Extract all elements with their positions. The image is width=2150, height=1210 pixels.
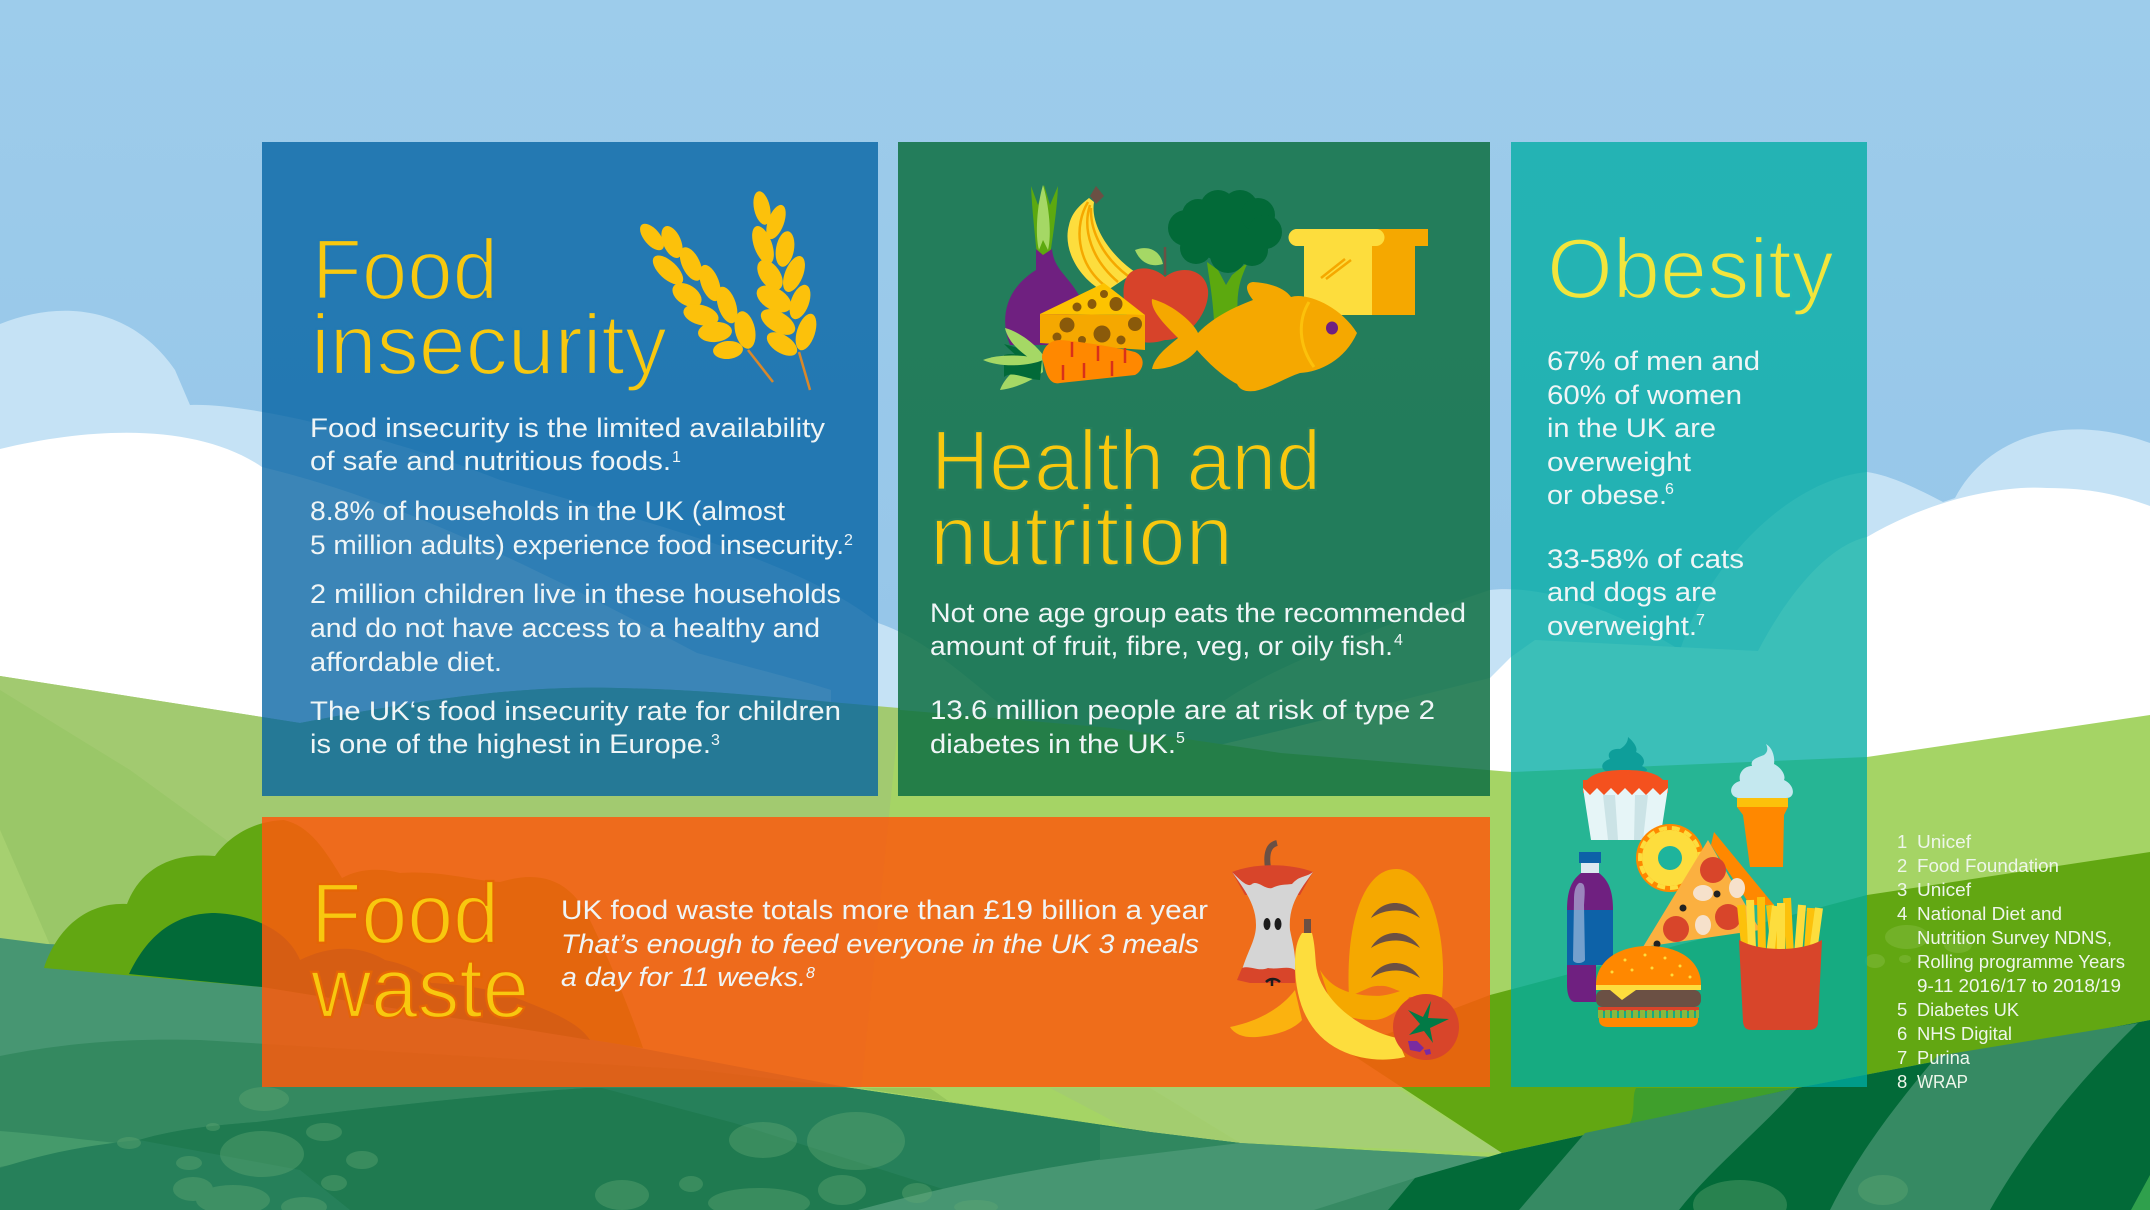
- text: health and nutrition: amount of fruit, fibre, veg, or oily fish.: [930, 631, 1393, 661]
- text: food waste: [561, 895, 1208, 992]
- bush: [44, 820, 643, 1048]
- text: food insecurity: affordable diet.: [310, 647, 502, 677]
- footnotes: 6: [1897, 1023, 1907, 1044]
- text: obesity: 33-58% of cats: [1547, 544, 1744, 574]
- panel: obesity: [1511, 142, 1867, 1087]
- text: food insecurity: 2: [844, 532, 853, 549]
- text: health and nutrition: Not one age group eats the recommended: [930, 598, 1466, 628]
- footnotes: Nutrition Survey NDNS,: [1917, 927, 2112, 948]
- text: obesity: 6: [1665, 481, 1674, 498]
- text: food insecurity: and do not have access to a healthy and: [310, 613, 820, 643]
- panel: food waste: [262, 817, 1490, 1087]
- footnotes: 1: [1897, 831, 1907, 852]
- text: obesity: 67% of men and: [1547, 346, 1760, 376]
- text: food insecurity: 1: [672, 449, 681, 466]
- heading: health and nutrition: Health and: [931, 414, 1321, 509]
- text: obesity: overweight.: [1547, 611, 1697, 641]
- footnotes: National Diet and: [1917, 903, 2062, 924]
- heading: food insecurity: Food: [312, 223, 498, 318]
- footnotes: 8: [1897, 1071, 1907, 1092]
- text: food insecurity: is one of the highest in Europe.: [310, 729, 711, 759]
- heading: health and nutrition: nutrition: [930, 489, 1233, 584]
- text: obesity: and dogs are: [1547, 577, 1717, 607]
- text: food waste: UK food waste totals more than £19 billion a year: [561, 895, 1208, 925]
- text: food insecurity: 5 million adults) experience food insecurity.: [310, 530, 844, 560]
- text: food insecurity: of safe and nutritious foods.: [310, 446, 671, 476]
- footnotes: 7: [1897, 1047, 1907, 1068]
- footnotes: Unicef: [1917, 879, 1972, 900]
- text: obesity: or obese.: [1547, 480, 1667, 510]
- heading: food insecurity: insecurity: [311, 298, 667, 393]
- footnotes: Unicef: [1917, 831, 1972, 852]
- footnotes: Diabetes UK: [1917, 999, 2020, 1020]
- illustration: healthy foods: [983, 185, 1428, 391]
- footnotes: NHS Digital: [1917, 1023, 2012, 1044]
- heading: obesity: Obesity: [1547, 222, 1834, 317]
- footnotes: Food Foundation: [1917, 855, 2059, 876]
- footnotes: Purina: [1917, 1047, 1971, 1068]
- illustration: junk food: [1567, 737, 1822, 1030]
- footnotes: WRAP: [1917, 1071, 1968, 1092]
- text: food insecurity: 2 million children live in these households: [310, 579, 841, 609]
- text: obesity: 7: [1696, 612, 1705, 629]
- heading: food waste: waste: [310, 941, 529, 1036]
- footnotes: Rolling programme Years: [1917, 951, 2125, 972]
- footnotes: 9-11 2016/17 to 2018/19: [1917, 975, 2121, 996]
- text: obesity: overweight: [1547, 447, 1692, 477]
- text: health and nutrition: 4: [1394, 632, 1403, 649]
- text: food insecurity: Food insecurity is the limited availability: [310, 413, 826, 443]
- footnotes: [1897, 831, 2125, 1092]
- panel: health and nutrition: [898, 142, 1490, 796]
- text: obesity: [1547, 346, 1760, 641]
- text: health and nutrition: diabetes in the UK.: [930, 729, 1176, 759]
- footnotes: 3: [1897, 879, 1907, 900]
- text: health and nutrition: 5: [1176, 730, 1185, 747]
- heading: food insecurity: [311, 223, 667, 393]
- text: food insecurity: [310, 413, 853, 759]
- text: food waste: That’s enough to feed everyone in the UK 3 meals: [561, 929, 1199, 959]
- heading: food waste: [310, 867, 529, 1036]
- text: food insecurity: 8.8% of households in the UK (almost: [310, 496, 786, 526]
- heading: health and nutrition: [930, 414, 1321, 584]
- text: health and nutrition: 13.6 million people are at risk of type 2: [930, 695, 1435, 725]
- footnotes: 4: [1897, 903, 1907, 924]
- text: food insecurity: The UK‘s food insecurity rate for children: [310, 696, 841, 726]
- footnotes: 2: [1897, 855, 1907, 876]
- text: obesity: in the UK are: [1547, 413, 1716, 443]
- footnotes: 5: [1897, 999, 1907, 1020]
- panel: food insecurity: [262, 142, 878, 796]
- icon: wheat: [636, 190, 820, 390]
- text: food insecurity: 3: [711, 732, 720, 749]
- illustration: food scraps: [1230, 843, 1459, 1060]
- heading: food waste: Food: [311, 867, 499, 962]
- text: food waste: a day for 11 weeks.: [561, 962, 806, 992]
- text: food waste: 8: [806, 965, 815, 982]
- text: health and nutrition: [930, 598, 1466, 759]
- text: obesity: 60% of women: [1547, 380, 1742, 410]
